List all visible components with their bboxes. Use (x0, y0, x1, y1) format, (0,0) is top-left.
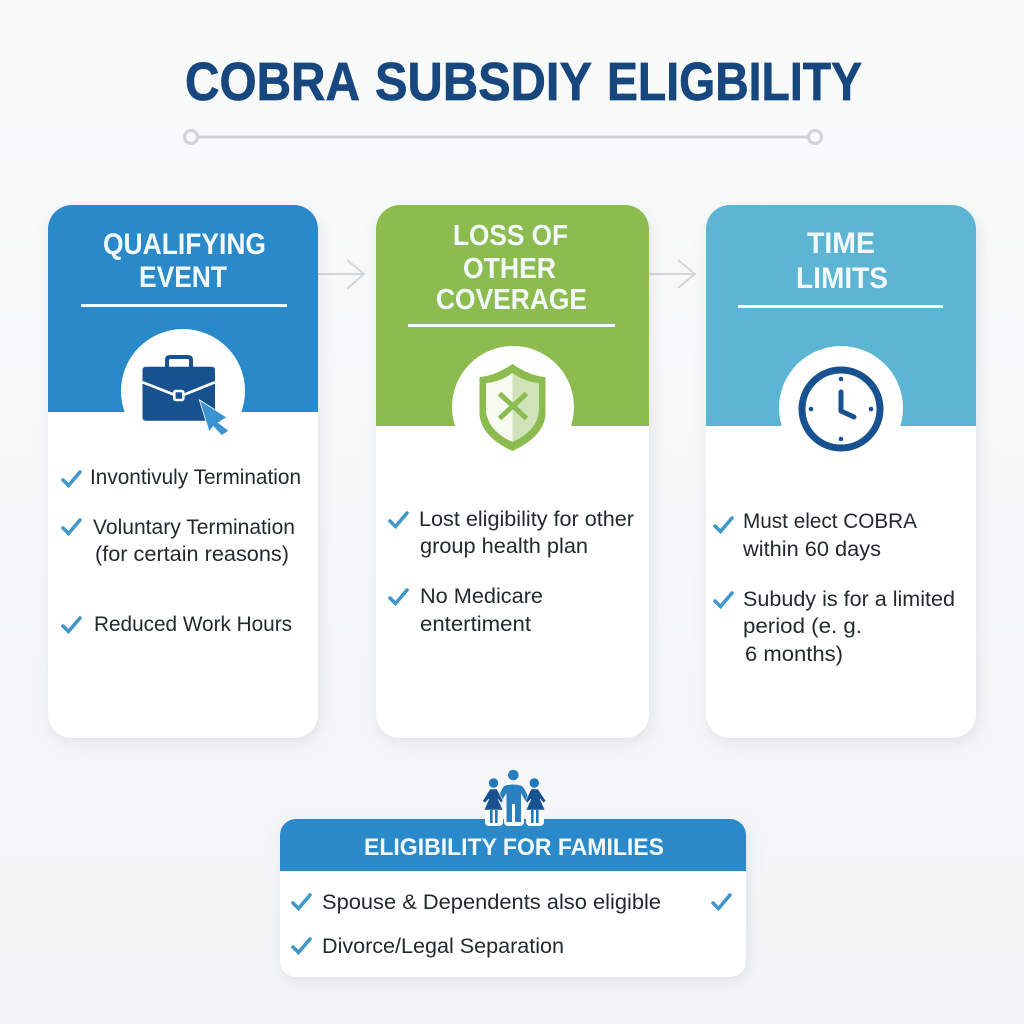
card header band (280, 819, 746, 871)
list: qualifying events (63, 465, 301, 636)
list: loss of coverage: No Medicare (420, 584, 543, 608)
title: COBRA (185, 52, 360, 112)
icon: clock (779, 346, 903, 470)
list: family eligibility: Divorce/Legal Separation (322, 934, 564, 958)
card header band (48, 205, 318, 412)
heading: time limits: TIME (807, 227, 875, 260)
list: qualifying events: Invontivuly Termination (90, 465, 301, 489)
heading underline (81, 304, 287, 307)
heading: loss of other coverage: LOSS OF (453, 220, 568, 252)
heading: loss of other coverage (436, 220, 587, 316)
list: qualifying events: Voluntary Termination (93, 515, 295, 539)
card background (376, 205, 649, 738)
card header band (376, 205, 649, 426)
arrow: qualifying event to loss of coverage (318, 260, 364, 289)
arrow: loss of coverage to time limits (649, 260, 695, 288)
title: SUBSDIY (375, 52, 592, 112)
panel: time limits (706, 205, 976, 738)
title divider with end circles (184, 130, 822, 144)
list: qualifying events: (for certain reasons) (95, 542, 289, 566)
list: family eligibility (293, 890, 730, 958)
title: ELIGBILITY (607, 52, 862, 112)
list: qualifying events: Reduced Work Hours (94, 612, 292, 636)
icon: shield with cross (452, 346, 574, 468)
card background (280, 819, 746, 977)
panel: eligibility for families (280, 770, 746, 977)
icon: family (482, 770, 546, 826)
card background (48, 205, 318, 738)
list: loss of coverage: group health plan (420, 534, 588, 558)
heading underline (738, 305, 943, 308)
title (185, 52, 862, 112)
heading: qualifying event: EVENT (139, 261, 227, 294)
card header band (706, 205, 976, 426)
heading: time limits (796, 227, 888, 295)
list: time limits: period (e. g. (743, 614, 862, 638)
list: time limits: 6 months) (745, 642, 843, 666)
heading: eligibility for families: ELIGIBILITY FOR FAMILIES (364, 834, 664, 861)
list: time limits: Subudy is for a limited (743, 587, 955, 611)
list: family eligibility: Spouse & Dependents also eligible (322, 890, 661, 914)
list: loss of coverage: Lost eligibility for other (419, 507, 634, 531)
heading: loss of other coverage: COVERAGE (436, 284, 587, 316)
card background (706, 205, 976, 738)
list: loss of coverage (390, 507, 634, 636)
heading: loss of other coverage: OTHER (463, 253, 556, 285)
panel: qualifying event (48, 205, 318, 738)
panel: loss of other coverage (376, 205, 649, 738)
heading: qualifying event: QUALIFYING (103, 228, 266, 261)
list: time limits: Must elect COBRA (743, 509, 918, 533)
heading: qualifying event (103, 228, 266, 294)
list: loss of coverage: entertiment (420, 612, 531, 636)
heading: time limits: LIMITS (796, 262, 888, 295)
list: time limits: within 60 days (742, 537, 881, 561)
icon: briefcase with cursor (121, 329, 245, 453)
heading underline (408, 324, 615, 327)
list: time limits (715, 509, 955, 666)
